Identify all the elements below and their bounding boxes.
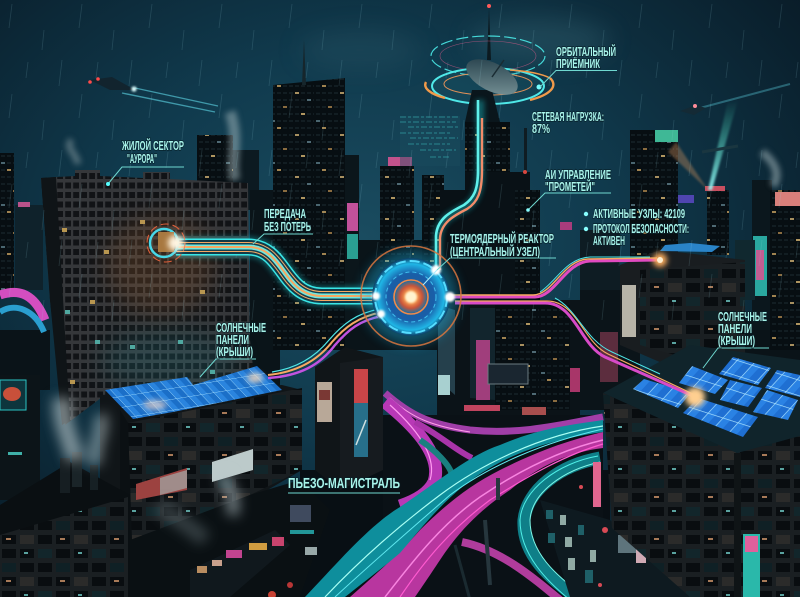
neon shops bbox=[197, 566, 207, 573]
residential block Aurora bbox=[41, 170, 255, 425]
lower ring bbox=[432, 68, 544, 104]
antenna mast bbox=[487, 8, 491, 60]
dish bbox=[461, 52, 523, 102]
label: orbital receiver: ОРБИТАЛЬНЫЙ bbox=[556, 44, 616, 59]
right mid building bbox=[620, 243, 745, 400]
label: solar panels left bbox=[200, 320, 266, 377]
dark filler behind blocks bbox=[250, 190, 280, 400]
status list: АКТИВЕН bbox=[593, 233, 625, 248]
tall central tower bbox=[273, 78, 345, 350]
smoke plumes upper bbox=[69, 112, 777, 186]
billboard left bbox=[317, 382, 332, 422]
label: solar panels right bbox=[703, 309, 769, 368]
towers behind reactor right bbox=[437, 300, 618, 419]
label: reactor: (ЦЕНТРАЛЬНЫЙ УЗЕЛ) bbox=[450, 244, 540, 259]
beams bbox=[668, 100, 738, 190]
left facade bbox=[603, 393, 737, 597]
roof bbox=[603, 345, 800, 453]
security protocol bbox=[584, 227, 588, 231]
label: residential sector bbox=[106, 138, 184, 186]
icon: flying ship right bbox=[680, 84, 790, 152]
left loop road bbox=[385, 402, 436, 506]
active nodes bbox=[584, 212, 588, 216]
third teal road bbox=[524, 458, 600, 597]
solar panels right bbox=[633, 357, 800, 437]
billboard right bbox=[212, 449, 253, 482]
tower under dish bbox=[465, 90, 500, 122]
label: piezo highway: ПЬЕЗО-МАГИСТРАЛЬ bbox=[288, 475, 400, 492]
bottom left building bbox=[0, 452, 130, 597]
label: solar panels left: (КРЫШИ) bbox=[216, 344, 253, 359]
thermonuclear reactor bbox=[361, 246, 461, 346]
status list bbox=[584, 206, 689, 248]
vertical street sign bbox=[593, 462, 601, 507]
energy line: reactor to left solar panels bbox=[268, 309, 382, 378]
label: orbital receiver: ПРИЁМНИК bbox=[556, 56, 600, 71]
label: reactor: ТЕРМОЯДЕРНЫЙ РЕАКТОР bbox=[450, 231, 554, 246]
lower centre block and shops bbox=[130, 480, 330, 597]
data readout panel bbox=[400, 117, 458, 157]
central spine tower bbox=[440, 122, 540, 300]
label: AI control bbox=[526, 167, 611, 212]
label: lossless transmission: БЕЗ ПОТЕРЬ bbox=[264, 219, 311, 234]
energy line: reactor to right building bbox=[450, 253, 667, 297]
energy line: reactor to right solar panels bbox=[455, 298, 705, 407]
mid right towers bbox=[630, 130, 678, 260]
billboard dark bbox=[488, 364, 528, 384]
status list: ПРОТОКОЛ БЕЗОПАСНОСТИ: bbox=[593, 221, 689, 236]
label: lossless transmission: ПЕРЕДАЧА bbox=[264, 206, 306, 221]
label: residential sector: "АУРОРА" bbox=[127, 151, 157, 166]
lower magenta road bbox=[462, 542, 560, 597]
dot bbox=[536, 84, 542, 90]
label: lossless transmission bbox=[253, 206, 313, 244]
energy line: reactor to dish bbox=[436, 100, 482, 270]
label: solar panels left: СОЛНЕЧНЫЕ bbox=[216, 320, 266, 335]
label: AI control: АИ УПРАВЛЕНИЕ bbox=[545, 167, 611, 182]
label: solar panels right: ПАНЕЛИ bbox=[718, 321, 752, 336]
magenta band main bbox=[350, 432, 603, 597]
smoke clouds in sky bbox=[300, 18, 610, 70]
billboard red bbox=[354, 369, 368, 403]
label: piezo highway bbox=[288, 475, 400, 493]
far right towers bbox=[752, 180, 772, 330]
tower behind big block bbox=[197, 135, 233, 195]
bright ports bbox=[431, 265, 441, 275]
middle billboard building bbox=[315, 347, 383, 490]
icon: flying ship left bbox=[88, 77, 218, 112]
right facade bbox=[737, 436, 800, 597]
upper dashed ring bbox=[431, 36, 545, 76]
label: AI control: "ПРОМЕТЕЙ" bbox=[545, 179, 595, 194]
piezo highway interchange bbox=[305, 393, 603, 597]
rooftop building with left solar panels bbox=[100, 366, 302, 545]
teal band main bbox=[305, 420, 603, 597]
thin upper road bbox=[385, 393, 603, 431]
billboard blue bbox=[354, 403, 368, 457]
lower ground and roads base bbox=[300, 470, 610, 597]
energy line: reactor to residential block bbox=[176, 247, 385, 296]
solar panels left bbox=[105, 366, 282, 419]
label: solar panels left: ПАНЕЛИ bbox=[216, 332, 249, 347]
orbital receiver dish and rings bbox=[425, 4, 553, 122]
billboards on tall tower bbox=[347, 203, 358, 231]
status list: АКТИВНЫЕ УЗЛЫ: 42109 bbox=[593, 206, 685, 221]
label: reactor bbox=[437, 231, 556, 270]
far left towers bbox=[0, 153, 14, 293]
bridge supports bbox=[485, 478, 498, 585]
billboard bbox=[743, 534, 760, 597]
distant skyline bbox=[0, 40, 800, 440]
pink neon strips bbox=[600, 332, 618, 382]
label: network load bbox=[532, 109, 604, 136]
label: network load: 87% bbox=[532, 121, 550, 136]
left highway fragment bbox=[0, 292, 45, 332]
towers right of central bbox=[380, 166, 414, 300]
lit windows bbox=[62, 220, 225, 384]
street with cars bbox=[540, 462, 690, 597]
node on residential block bbox=[147, 224, 185, 262]
label: network load: СЕТЕВАЯ НАГРУЗКА: bbox=[532, 109, 604, 124]
label: residential sector: ЖИЛОЙ СЕКТОР bbox=[121, 138, 184, 153]
left side building with sign bbox=[0, 375, 40, 500]
smoke plumes lower bbox=[62, 398, 233, 540]
label: orbital receiver bbox=[540, 44, 617, 87]
billboard left bbox=[136, 468, 187, 500]
right foreground building bbox=[603, 345, 800, 597]
warm glow on facade bbox=[105, 215, 215, 315]
label: solar panels right: (КРЫШИ) bbox=[718, 333, 755, 348]
rain overlay bbox=[0, 0, 800, 320]
